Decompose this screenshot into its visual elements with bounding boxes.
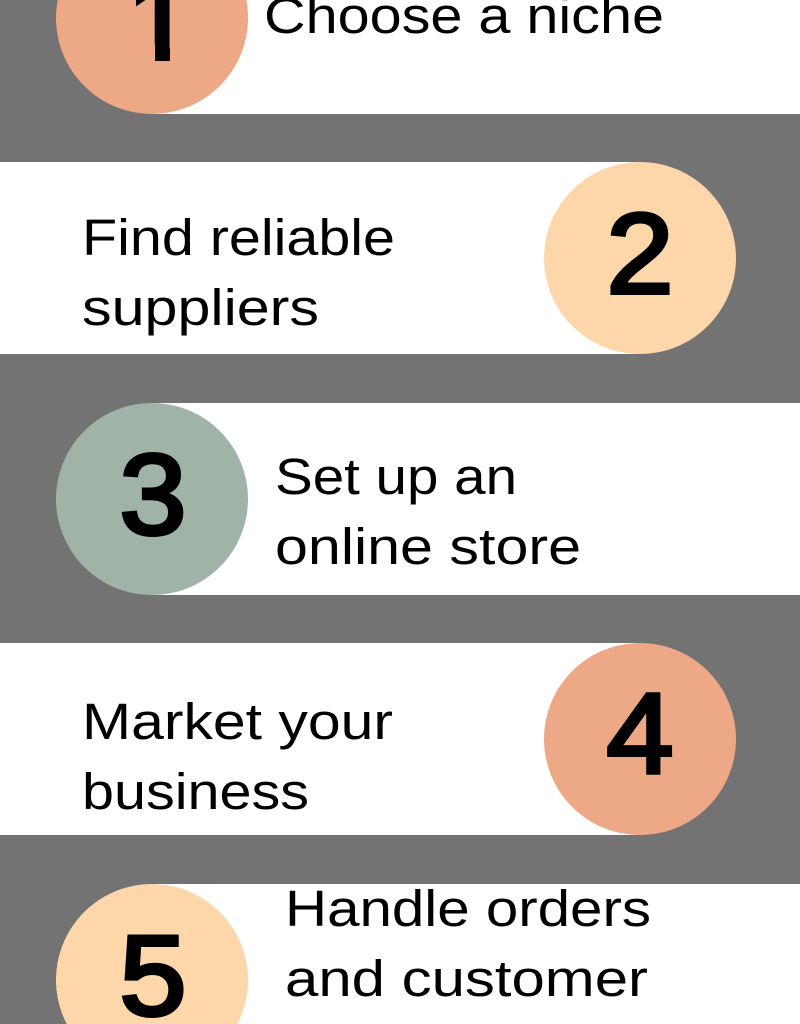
step 5 xyxy=(56,880,800,1024)
step 3: online store xyxy=(275,518,581,575)
step 5: and customer xyxy=(285,950,648,1007)
step 2: suppliers xyxy=(82,279,319,336)
step 4 xyxy=(0,643,736,835)
step 4: 4 xyxy=(606,671,674,798)
step 4: business xyxy=(82,763,309,820)
step 2: Find reliable xyxy=(82,209,395,266)
step 3: Set up an xyxy=(275,448,517,505)
step 5: Handle orders xyxy=(285,880,651,937)
step 2: 2 xyxy=(606,191,674,318)
step 3 xyxy=(56,403,800,595)
step 2 xyxy=(0,162,736,354)
step 3: 3 xyxy=(120,432,186,559)
step 1 xyxy=(56,0,800,114)
step 4: Market your xyxy=(82,693,393,750)
